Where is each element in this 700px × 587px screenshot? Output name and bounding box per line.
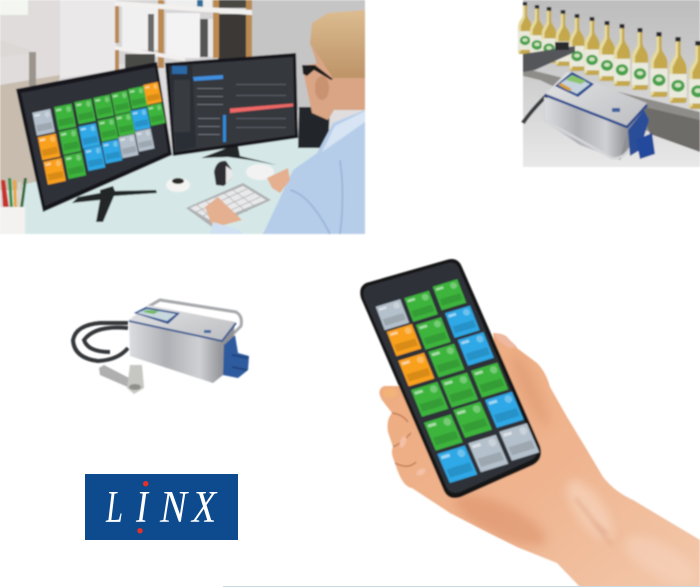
cable bbox=[523, 95, 547, 123]
logo wordmark: I bbox=[135, 482, 150, 532]
printer body bbox=[544, 72, 655, 160]
pencil cup bbox=[0, 178, 27, 234]
conveyor rail bbox=[523, 68, 700, 152]
bookshelf bbox=[115, 0, 252, 70]
app status tiles bbox=[376, 279, 539, 483]
touch screen bbox=[555, 72, 594, 97]
desk bbox=[22, 132, 320, 234]
logo wordmark: N bbox=[159, 483, 189, 533]
photo: printer on bottling line bbox=[518, 0, 700, 167]
keyboard bbox=[186, 183, 271, 227]
photo: operator at dual monitors bbox=[0, 0, 365, 234]
print head bracket bbox=[523, 46, 575, 72]
right monitor bbox=[165, 53, 298, 165]
blue connector bbox=[223, 335, 249, 378]
product photo: printer with cable and head bbox=[73, 300, 249, 394]
touch screen bbox=[134, 307, 180, 324]
cable bbox=[73, 323, 128, 361]
hand holding phone bbox=[360, 259, 700, 587]
glasses bbox=[302, 65, 333, 80]
monitor stand bbox=[72, 186, 157, 222]
logo wordmark: L bbox=[105, 483, 123, 533]
left monitor bbox=[16, 62, 172, 222]
finger nails bbox=[494, 333, 517, 348]
status tile grid bbox=[32, 82, 165, 185]
body bbox=[129, 305, 249, 383]
phone bbox=[360, 259, 541, 498]
handle bbox=[146, 300, 241, 336]
logo wordmark: X bbox=[190, 483, 218, 533]
dark laptop behind monitor bbox=[298, 107, 330, 148]
bottom edge line bbox=[223, 586, 700, 587]
ring tape bbox=[166, 178, 190, 192]
tape dispenser bbox=[214, 161, 232, 186]
mouse bbox=[246, 164, 274, 180]
hand bbox=[379, 333, 700, 587]
print head bbox=[99, 365, 144, 394]
finger separations bbox=[392, 413, 416, 466]
blue mount bbox=[628, 110, 649, 156]
bottle row bbox=[518, 2, 700, 109]
logo wordmark bbox=[105, 482, 218, 533]
person bbox=[205, 10, 365, 234]
Linx logo bbox=[85, 474, 238, 540]
